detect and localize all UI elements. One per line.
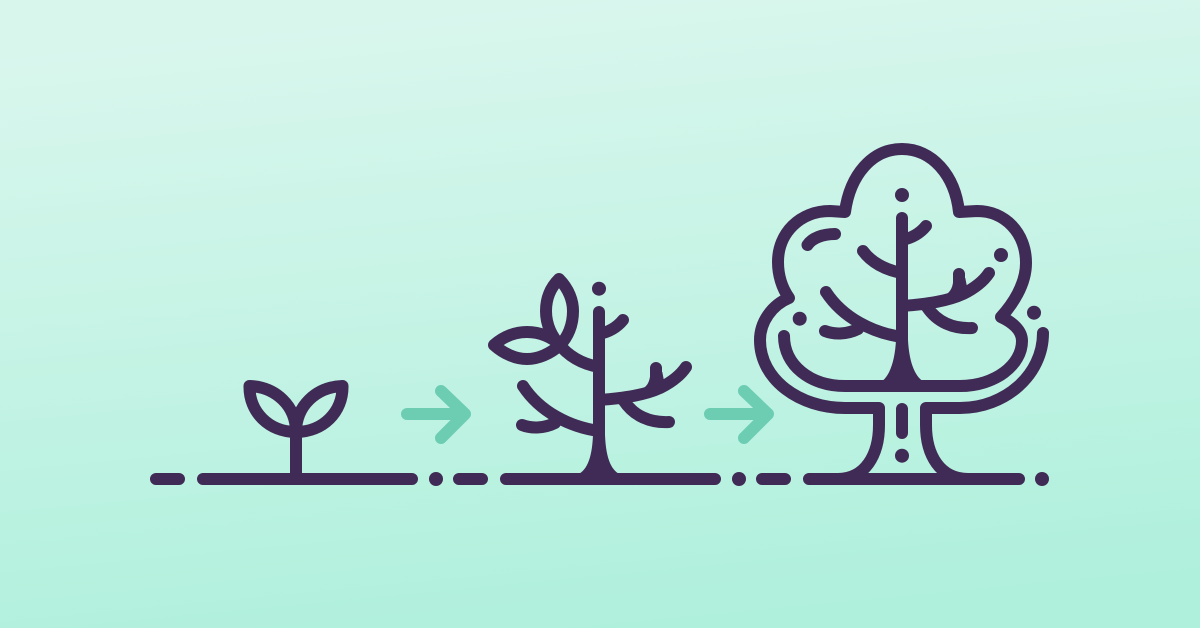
tree dots xyxy=(793,188,1041,463)
trunk centre dash xyxy=(896,409,908,433)
tree lower right outline xyxy=(926,333,1043,479)
tree branch fillet xyxy=(945,278,968,295)
arrow: sprout to sapling xyxy=(407,391,465,438)
tree trunk xyxy=(896,218,908,345)
sapling branch fillet xyxy=(642,372,665,389)
arrow: sapling to tree xyxy=(710,391,768,438)
crown highlight xyxy=(808,234,835,245)
sapling branches xyxy=(522,320,686,431)
tree branches xyxy=(825,226,989,337)
sapling trunk xyxy=(593,312,605,440)
icon: full tree xyxy=(760,149,1043,479)
tree crown outline xyxy=(760,149,1026,479)
sapling top dot xyxy=(592,282,606,296)
ground line xyxy=(156,472,1049,486)
icon: sapling with leaves xyxy=(494,279,686,475)
sapling trunk flare xyxy=(576,435,622,475)
icon: sprout xyxy=(249,386,343,479)
horizontal leaf xyxy=(494,332,560,359)
tree trunk flare xyxy=(881,340,924,382)
vertical leaf xyxy=(546,279,573,345)
